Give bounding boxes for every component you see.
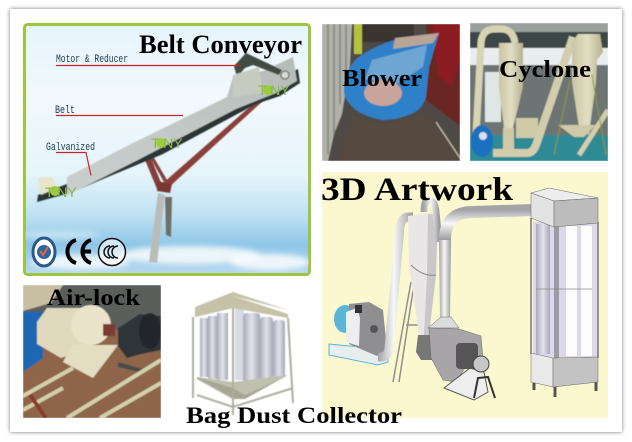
certification logos xyxy=(33,238,126,266)
hopper xyxy=(197,375,288,395)
label: Bag Dust Collector: Bag Dust Collector xyxy=(186,403,402,429)
label: Cyclone: Cyclone xyxy=(499,57,591,83)
watermarks: T NY xyxy=(151,135,183,151)
panel: blower xyxy=(322,24,460,161)
panel: cyclone xyxy=(470,23,608,161)
top bend pipe xyxy=(424,200,439,242)
fan xyxy=(428,317,495,400)
panel: air-lock xyxy=(23,285,161,418)
hammer mill xyxy=(329,302,388,365)
inlet pipe xyxy=(378,217,413,357)
panel: bag dust collector xyxy=(193,292,293,415)
legs xyxy=(193,308,293,415)
label: Blower: Blower xyxy=(342,66,422,92)
watermarks: T NY xyxy=(258,82,290,98)
heading: 3D Artwork: 3D Artwork xyxy=(321,172,514,208)
labels on the conveyor: Galvanized xyxy=(46,142,95,154)
cyclone body xyxy=(408,213,438,360)
conveyor belt xyxy=(37,53,300,202)
main duct to collector xyxy=(445,210,533,240)
labels on the conveyor: Belt xyxy=(55,105,75,117)
watermarks xyxy=(45,82,290,200)
filter bags xyxy=(200,308,285,383)
tripod legs xyxy=(393,282,418,382)
heading: Belt Conveyor: Belt Conveyor xyxy=(139,30,302,59)
watermarks: T NY xyxy=(45,184,77,200)
panel: belt conveyor xyxy=(20,24,310,274)
labels on the conveyor xyxy=(46,54,241,176)
roof xyxy=(195,292,288,317)
panel: 3D artwork xyxy=(321,172,608,418)
collector tower xyxy=(531,188,598,397)
conveyor support legs xyxy=(138,96,265,263)
label: Air-lock: Air-lock xyxy=(47,285,140,310)
labels on the conveyor: Motor & Reducer xyxy=(56,54,128,66)
